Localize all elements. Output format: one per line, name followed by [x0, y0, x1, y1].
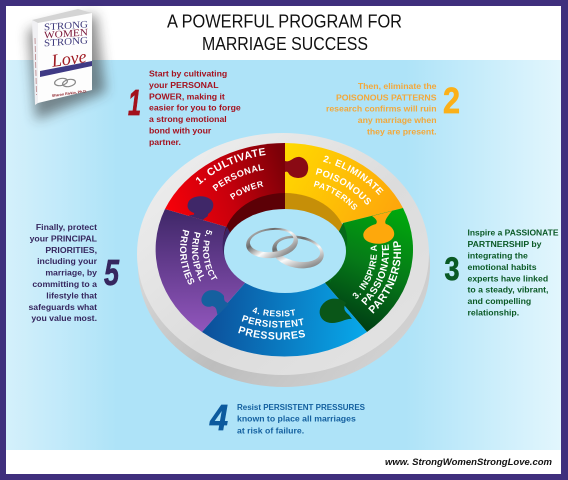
title: A POWERFUL PROGRAM FOR: [167, 11, 402, 32]
inner wall gold: [285, 193, 345, 240]
wheel base side: [138, 145, 430, 387]
label 3: PARTNERSHIP: [368, 241, 402, 314]
segment 5 purple: [156, 209, 245, 332]
text block 3: experts have linked: [468, 273, 548, 283]
puzzle tab blue: [201, 290, 229, 315]
label 5: PRINCIPAL: [192, 232, 204, 282]
number 3: 3: [444, 251, 460, 287]
text block 3: integrating the: [468, 250, 528, 260]
label 2: POISONOUS: [316, 168, 371, 205]
text block 1: partner.: [149, 137, 181, 147]
icon: book cover: Love: [49, 46, 88, 71]
text block 1: bond with your: [149, 125, 212, 135]
inner wall dark green: [325, 223, 347, 283]
segment 4 blue: [202, 283, 367, 357]
text block 5: your PRINCIPAL: [30, 233, 98, 243]
text block 2: Then, eliminate the: [358, 81, 437, 91]
label 4: 4. RESIST: [252, 308, 296, 317]
puzzle wheel: [137, 133, 430, 387]
text block 1: Start by cultivating: [149, 68, 227, 78]
segment 2 yellow: [285, 143, 403, 223]
number 5: 5: [104, 252, 120, 293]
label 3: 3. INSPIRE A: [352, 245, 377, 299]
text block 1: POWER, making it: [149, 91, 225, 101]
label 2: PATTERNS: [314, 180, 358, 210]
label 3: [352, 241, 402, 314]
light blue background panel: [6, 60, 561, 450]
label 2: 2. ELIMINATE: [323, 156, 384, 196]
label 5: PRIORITIES: [180, 230, 194, 285]
text block 5: committing to a: [32, 279, 97, 289]
text block 5: PRIORITIES,: [45, 245, 97, 255]
number 1: 1: [128, 82, 141, 123]
text block 3: relationship.: [468, 308, 519, 318]
text block 3: Inspire a PASSIONATE: [468, 228, 559, 238]
label 2: [314, 156, 384, 210]
label 1: POWER: [230, 181, 264, 200]
icon: book cover: STRONG: [44, 19, 88, 33]
text block 1: a strong emotional: [149, 114, 227, 124]
text block 3: PARTNERSHIP by: [468, 239, 542, 249]
label 5: 5. PROTECT: [202, 230, 218, 280]
label 4: PRESSURES: [238, 326, 305, 340]
puzzle tab dark green: [320, 299, 352, 323]
icon: book cover: STRONG: [44, 35, 88, 49]
puzzle tab red: [285, 157, 308, 178]
centre hole: [224, 209, 346, 293]
segment 3 green: [325, 208, 413, 332]
text block 2: any marriage when: [358, 115, 436, 125]
text block 5: you value most.: [31, 313, 97, 323]
text block 3: to a steady, vibrant,: [468, 285, 548, 295]
text block 2: they are present.: [367, 126, 436, 136]
text block 5: marriage, by: [45, 268, 97, 278]
label 4: [238, 308, 305, 340]
text block 3: emotional habits: [468, 262, 537, 272]
text block 5: including your: [37, 256, 98, 266]
number 2: 2: [443, 80, 460, 121]
label 1: 1. CULTIVATE: [196, 148, 266, 184]
label 4: PERSISTENT: [242, 315, 304, 328]
website url: www. StrongWomenStrongLove.com: [385, 457, 552, 467]
text block 5: Finally, protect: [36, 222, 97, 232]
inner wall red: [223, 193, 285, 243]
puzzle tab purple: [188, 196, 213, 220]
inner wall purple: [223, 227, 245, 283]
puzzle tab orange: [363, 211, 394, 244]
text block 2: POISONOUS PATTERNS: [336, 92, 437, 102]
text block 4: Resist PERSISTENT PRESSURES: [237, 402, 365, 412]
white footer band: [6, 450, 561, 474]
text block 3: and compelling: [468, 296, 531, 306]
text block 4: known to place all marriages: [237, 414, 356, 424]
text block 1: your PERSONAL: [149, 80, 219, 90]
label 5: [180, 230, 218, 285]
number 4: 4: [209, 397, 228, 438]
white header band: [6, 6, 561, 60]
text block 4: at risk of failure.: [237, 426, 304, 436]
segment 1 red: [165, 143, 285, 227]
text block 5: safeguards what: [28, 302, 97, 312]
icon: book cover: Sharon Rivkin, Ph.D.: [52, 89, 87, 98]
text block 2: research confirms will ruin: [326, 104, 436, 114]
text block 5: lifestyle that: [46, 290, 97, 300]
icon: book cover: WOMEN: [44, 27, 88, 41]
text block 1: easier for you to forge: [149, 103, 241, 113]
wheel top rim: [137, 133, 429, 375]
icon: wedding rings: [245, 225, 326, 272]
title: MARRIAGE SUCCESS: [202, 33, 368, 54]
label 3: PASSIONATE: [361, 244, 389, 306]
icon: book cover: [28, 9, 106, 120]
label 1: PERSONAL: [212, 164, 264, 192]
